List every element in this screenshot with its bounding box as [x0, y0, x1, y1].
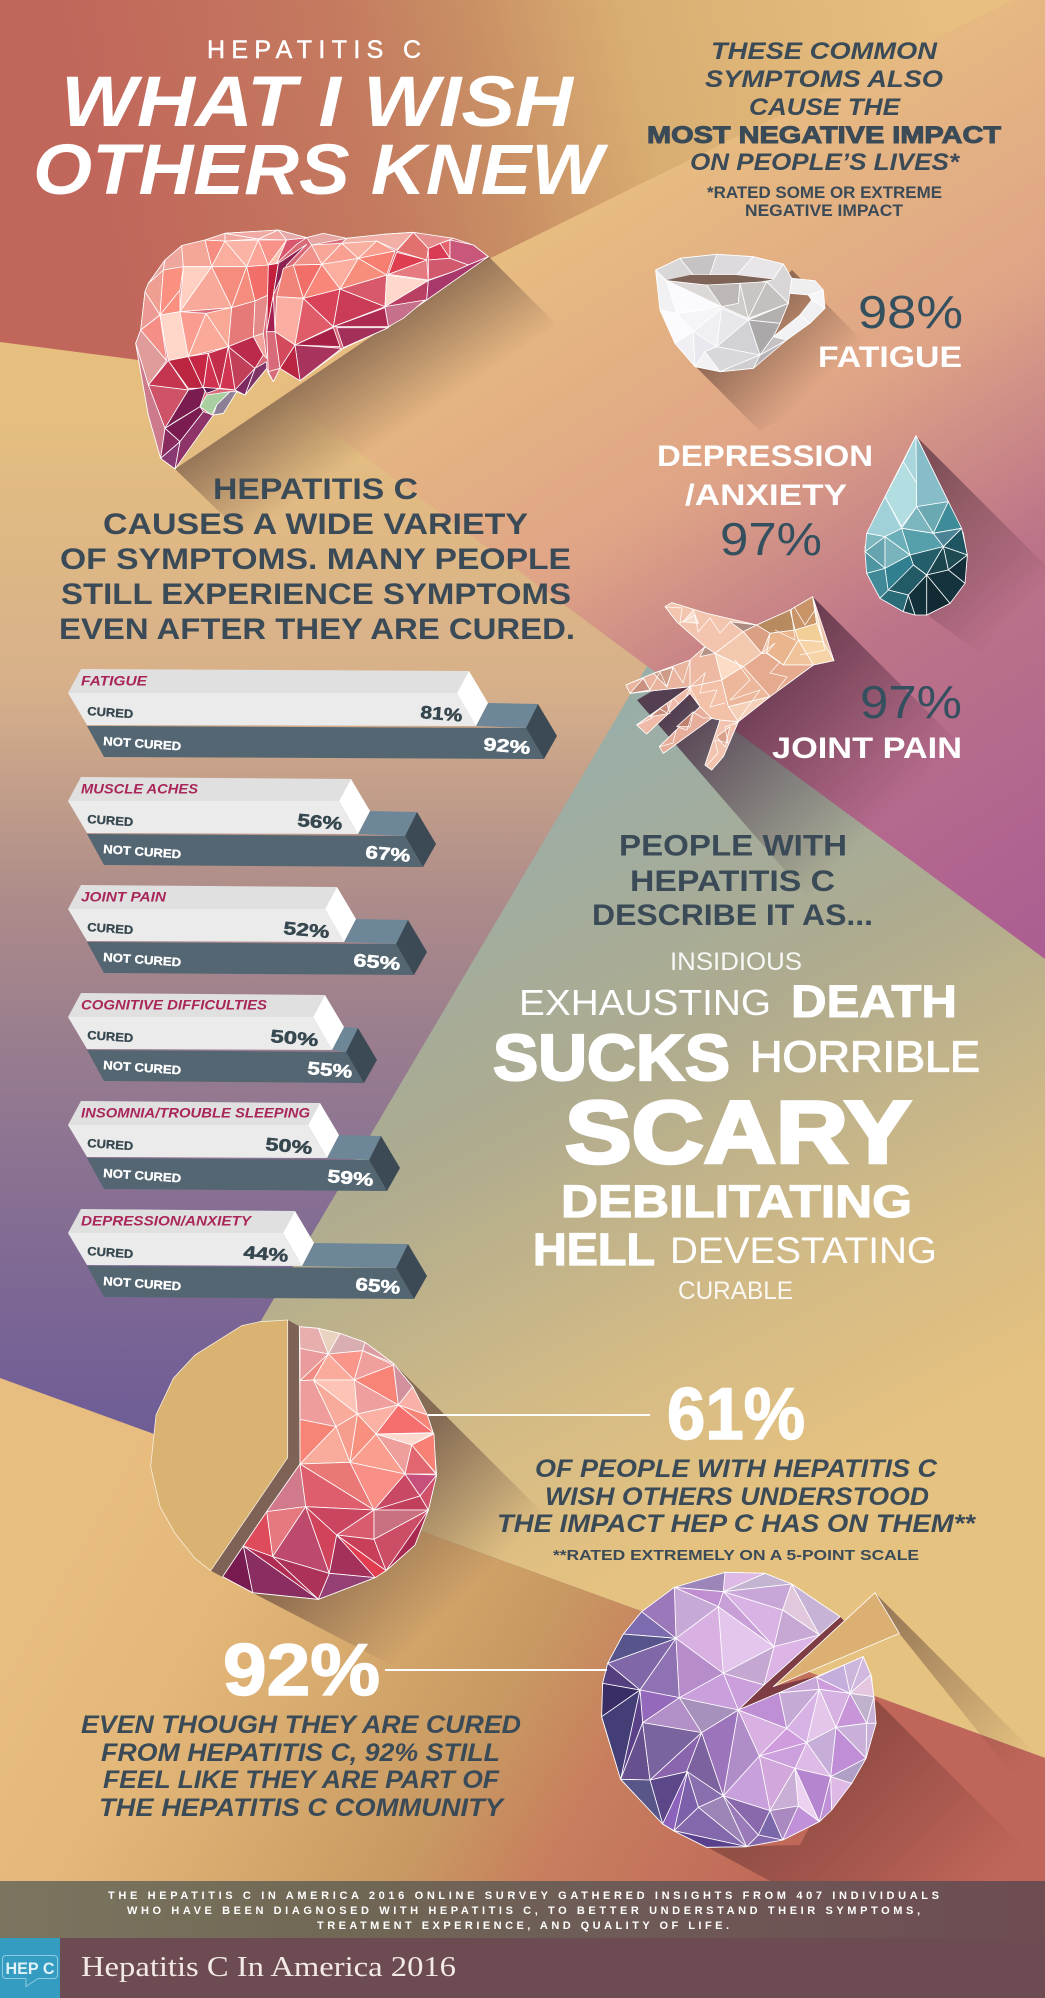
- text: hepatitis C causes symptoms: STILL EXPERIENCE SYMPTOMS: [61, 578, 571, 611]
- bar: cognitive difficulties: CURED: [87, 1028, 134, 1045]
- bar: fatigue: NOT CURED: [103, 734, 182, 753]
- bar: insomnia/trouble sleeping: [68, 1101, 400, 1191]
- word cloud: EXHAUSTING: [519, 982, 771, 1023]
- hand mesh lines: [626, 600, 825, 765]
- logo: HEP C speech bubble: HEP C: [6, 1959, 54, 1978]
- leader line: 92%: [385, 1669, 607, 1671]
- stat: joint pain 97%: JOINT PAIN: [772, 732, 962, 765]
- stat: 61% wish others understood: THE IMPACT HEP C HAS ON THEM**: [497, 1510, 976, 1538]
- logo: HEP C speech bubble: [0, 1938, 60, 1998]
- leader line: 61%: [428, 1414, 650, 1416]
- icon: low-poly hand: [626, 597, 834, 770]
- bar: depression/anxiety: [68, 1209, 427, 1299]
- stat: depression/anxiety 97%: 97%: [720, 513, 822, 565]
- stat: depression/anxiety 97%: DEPRESSION: [657, 440, 873, 473]
- title line 2: OTHERS KNEW: [33, 131, 609, 210]
- heading: people describe it as: HEPATITIS C: [630, 865, 835, 898]
- bar: insomnia/trouble sleeping: CURED: [87, 1136, 134, 1153]
- bar: fatigue: CURED: [87, 704, 134, 721]
- bar: fatigue: 81%: [420, 702, 463, 726]
- text: common symptoms intro: THESE COMMON: [711, 38, 938, 65]
- stat: fatigue 98%: FATIGUE: [818, 341, 962, 374]
- stat: depression/anxiety 97%: [657, 440, 873, 565]
- bar: cognitive difficulties: NOT CURED: [103, 1058, 182, 1077]
- word cloud: DEBILITATING: [561, 1176, 912, 1227]
- bar: joint pain: NOT CURED: [103, 950, 182, 969]
- text: common symptoms intro: CAUSE THE: [749, 94, 901, 121]
- bar: muscle aches: MUSCLE ACHES: [81, 780, 199, 796]
- bar: insomnia/trouble sleeping: 50%: [265, 1134, 313, 1158]
- text: common symptoms intro: NEGATIVE IMPACT: [745, 202, 903, 220]
- chart: 61% pie: [151, 1320, 437, 1599]
- icon: low-poly liver: [136, 230, 488, 469]
- bar: cognitive difficulties: 55%: [307, 1058, 353, 1082]
- bar: joint pain: JOINT PAIN: [81, 888, 167, 904]
- stat: 92% still feel part of community: FEEL LIKE THEY ARE PART OF: [103, 1766, 500, 1794]
- stat: 92% still feel part of community: EVEN THOUGH THEY ARE CURED: [81, 1711, 521, 1739]
- bar: muscle aches: 56%: [297, 810, 343, 834]
- text: hepatitis C causes symptoms: [59, 473, 575, 646]
- stat: 92% still feel part of community: FROM HEPATITIS C, 92% STILL: [101, 1739, 500, 1767]
- text: hepatitis C causes symptoms: HEPATITIS C: [213, 473, 418, 506]
- text: common symptoms intro: [647, 38, 1001, 220]
- word cloud: [493, 948, 980, 1305]
- stat: 92% still feel part of community: 92%: [223, 1630, 380, 1711]
- text: hepatitis C causes symptoms: EVEN AFTER THEY ARE CURED.: [59, 613, 575, 646]
- text: hepatitis C causes symptoms: CAUSES A WIDE VARIETY: [103, 508, 528, 541]
- footer: survey note band: THE HEPATITIS C IN AMERICA 2016 ONLINE SURVEY GATHERED INSIGHTS FROM 407 INDIVIDUALS: [108, 1890, 939, 1902]
- bar: insomnia/trouble sleeping: NOT CURED: [103, 1166, 182, 1185]
- footer: survey note band: [0, 1881, 1045, 1938]
- bar: muscle aches: 67%: [365, 842, 411, 866]
- stat: 92% still feel part of community: [81, 1630, 521, 1822]
- text: common symptoms intro: MOST NEGATIVE IMPACT: [647, 122, 1001, 149]
- bar: insomnia/trouble sleeping: 59%: [327, 1166, 374, 1190]
- stat: 61% wish others understood: [497, 1374, 976, 1564]
- bar: depression/anxiety: DEPRESSION/ANXIETY: [81, 1212, 253, 1228]
- stat: 61% wish others understood: WISH OTHERS UNDERSTOOD: [545, 1483, 929, 1511]
- word cloud: DEVESTATING: [670, 1230, 937, 1271]
- bar: fatigue: FATIGUE: [81, 672, 148, 688]
- footer: survey note band: WHO HAVE BEEN DIAGNOSED WITH HEPATITIS C, TO BETTER UNDERSTAND THEIR SYMPTOMS,: [127, 1905, 920, 1917]
- footer title: Hepatitis C In America 2016: [81, 1951, 456, 1983]
- icon: low-poly coffee cup: [656, 254, 825, 372]
- footer: brand bar: [0, 1938, 1045, 1998]
- bar: cognitive difficulties: COGNITIVE DIFFICULTIES: [81, 996, 268, 1012]
- bar: cognitive difficulties: [68, 993, 377, 1083]
- word cloud: DEATH: [791, 976, 957, 1027]
- bar: muscle aches: CURED: [87, 812, 134, 829]
- word cloud: SCARY: [565, 1082, 911, 1182]
- bar: insomnia/trouble sleeping: INSOMNIA/TROUBLE SLEEPING: [81, 1104, 310, 1120]
- bar: depression/anxiety: CURED: [87, 1244, 134, 1261]
- word cloud: HELL: [533, 1224, 655, 1275]
- bar: muscle aches: NOT CURED: [103, 842, 182, 861]
- text: common symptoms intro: ON PEOPLE’S LIVES*: [690, 149, 961, 176]
- stat: depression/anxiety 97%: /ANXIETY: [685, 479, 847, 512]
- eyebrow: Hepatitis C: HEPATITIS C: [207, 36, 421, 64]
- word cloud: SUCKS: [493, 1021, 730, 1094]
- chart: symptoms cured vs not cured: [68, 669, 557, 1299]
- heading: people describe it as: DESCRIBE IT AS...: [592, 899, 873, 932]
- text: common symptoms intro: SYMPTOMS ALSO: [705, 66, 943, 93]
- bar: cognitive difficulties: 50%: [270, 1026, 319, 1050]
- bar: muscle aches: [68, 777, 436, 867]
- stat: 92% still feel part of community: THE HEPATITIS C COMMUNITY: [99, 1794, 506, 1822]
- stat: joint pain 97%: 97%: [860, 676, 962, 728]
- bar: joint pain: 65%: [353, 950, 401, 974]
- bar: depression/anxiety: 65%: [355, 1274, 401, 1298]
- icon: low-poly water drop: [865, 436, 967, 615]
- stat: 61% wish others understood: **RATED EXTREMELY ON A 5-POINT SCALE: [553, 1547, 919, 1564]
- stat: joint pain 97%: [772, 676, 962, 765]
- stat: 61% wish others understood: 61%: [667, 1374, 805, 1455]
- text: common symptoms intro: *RATED SOME OR EXTREME: [707, 184, 942, 202]
- bar: fatigue: [68, 669, 557, 759]
- footer: survey note band: TREATMENT EXPERIENCE, AND QUALITY OF LIFE.: [317, 1920, 729, 1932]
- chart: 92% pie: [602, 1572, 899, 1847]
- heading: people describe it as: PEOPLE WITH: [619, 830, 847, 862]
- bar: depression/anxiety: 44%: [243, 1242, 289, 1266]
- title line 1: WHAT I WISH: [61, 63, 575, 142]
- word cloud: INSIDIOUS: [670, 948, 802, 976]
- bar: joint pain: CURED: [87, 920, 134, 937]
- bar: joint pain: 52%: [283, 918, 330, 942]
- title block: [33, 36, 609, 210]
- bar: depression/anxiety: NOT CURED: [103, 1274, 182, 1293]
- text: hepatitis C causes symptoms: OF SYMPTOMS. MANY PEOPLE: [60, 543, 571, 576]
- bar: joint pain: [68, 885, 427, 975]
- bar: fatigue: 92%: [483, 734, 531, 758]
- word cloud: HORRIBLE: [750, 1032, 980, 1082]
- heading: people describe it as: [592, 830, 873, 932]
- stat: 61% wish others understood: OF PEOPLE WITH HEPATITIS C: [535, 1455, 938, 1483]
- stat: fatigue 98%: 98%: [858, 286, 963, 338]
- stat: fatigue 98%: [818, 286, 963, 374]
- word cloud: CURABLE: [678, 1277, 793, 1305]
